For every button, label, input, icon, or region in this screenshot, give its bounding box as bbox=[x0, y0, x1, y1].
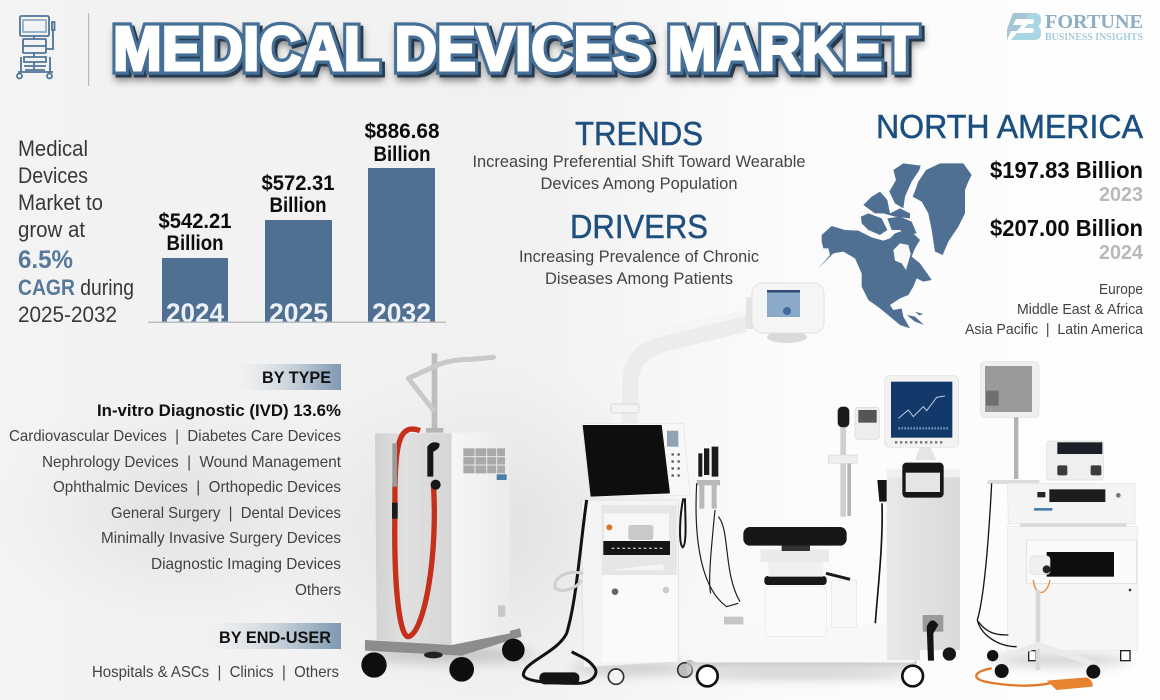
by end-user heading bbox=[205, 623, 341, 649]
by end-user heading: BY END-USER bbox=[219, 629, 331, 647]
by type list: Others bbox=[295, 582, 341, 599]
by type heading: BY TYPE bbox=[262, 369, 331, 387]
CAGR text block: Devices bbox=[18, 163, 88, 188]
drivers block bbox=[519, 209, 759, 288]
bar 2025 bbox=[262, 172, 335, 328]
by type list: Nephrology Devices | Wound Management bbox=[42, 454, 342, 471]
device: stacked unit with stand monitor bbox=[976, 362, 1137, 690]
trends block: Increasing Preferential Shift Toward Wearable bbox=[472, 152, 806, 171]
title: MEDICAL DEVICES MARKET bbox=[115, 21, 920, 90]
title: MEDICAL DEVICES MARKET bbox=[113, 15, 918, 84]
trends block: Devices Among Population bbox=[540, 174, 738, 193]
other regions: Middle East & Africa bbox=[1017, 301, 1144, 318]
by end-user list: Hospitals & ASCs | Clinics | Others bbox=[92, 664, 339, 681]
by type list bbox=[9, 402, 342, 599]
bar 2032: $886.68 bbox=[364, 120, 440, 143]
other regions: Asia Pacific | Latin America bbox=[965, 321, 1144, 338]
by type list: Minimally Invasive Surgery Devices bbox=[101, 530, 341, 547]
region values: $207.00 Billion bbox=[990, 215, 1143, 241]
header divider bbox=[88, 13, 89, 86]
device: articulated arm monitor bbox=[611, 283, 824, 425]
CAGR text block: CAGR during bbox=[18, 275, 134, 300]
drivers block: Increasing Prevalence of Chronic bbox=[519, 247, 759, 266]
by type list: General Surgery | Dental Devices bbox=[111, 505, 341, 522]
by type list: Diagnostic Imaging Devices bbox=[151, 556, 341, 573]
bar 2024: $542.21 bbox=[158, 210, 232, 233]
bar 2024: 2024 bbox=[166, 298, 224, 328]
bar 2025: 2025 bbox=[269, 298, 328, 328]
CAGR text block: Medical bbox=[18, 136, 88, 161]
bar 2032: Billion bbox=[374, 143, 430, 166]
CAGR text block: grow at bbox=[18, 217, 85, 242]
device: monitor cart with black hose bbox=[523, 423, 743, 684]
bar 2024 bbox=[158, 210, 232, 328]
other regions: Europe bbox=[1099, 281, 1143, 298]
title: MEDICAL DEVICES MARKET bbox=[113, 15, 918, 84]
CAGR text block: 6.5% bbox=[18, 246, 73, 274]
device: small wall mounted meters bbox=[828, 407, 879, 517]
map: North America bbox=[818, 163, 972, 328]
bar 2025: $572.31 bbox=[262, 172, 335, 195]
bar 2032 bbox=[364, 120, 440, 328]
by type list: In-vitro Diagnostic (IVD) 13.6% bbox=[97, 402, 341, 420]
CAGR text block bbox=[18, 136, 134, 327]
device: tall console with blue monitor bbox=[875, 376, 960, 661]
trends block: TRENDS bbox=[575, 116, 703, 153]
region values: 2023 bbox=[1099, 184, 1143, 206]
drivers block: DRIVERS bbox=[570, 209, 708, 246]
device: cabinet with red hose bbox=[361, 353, 525, 682]
by type heading bbox=[235, 364, 341, 390]
bar 2024: Billion bbox=[166, 232, 224, 255]
drivers block: Diseases Among Patients bbox=[545, 269, 733, 288]
by type list: Ophthalmic Devices | Orthopedic Devices bbox=[53, 479, 341, 496]
logo: Fortune Business Insights: FORTUNE bbox=[1045, 11, 1143, 33]
region values bbox=[990, 157, 1144, 264]
other regions bbox=[965, 281, 1144, 338]
bar 2025: Billion bbox=[270, 194, 326, 217]
header icon: medical cart bbox=[17, 16, 54, 78]
trends block bbox=[472, 116, 806, 193]
CAGR text block: Market to bbox=[18, 190, 103, 215]
logo: Fortune Business Insights: BUSINESS INSIGHTS bbox=[1045, 32, 1143, 43]
bar 2032: 2032 bbox=[372, 298, 431, 328]
region values: $197.83 Billion bbox=[990, 157, 1143, 183]
floor shadows bbox=[365, 647, 1130, 678]
bar chart: market size bbox=[148, 120, 446, 328]
logo: Fortune Business Insights bbox=[1007, 11, 1143, 43]
title: MEDICAL DEVICES MARKET bbox=[116, 18, 921, 87]
by type list: Cardiovascular Devices | Diabetes Care Devices bbox=[9, 428, 341, 445]
CAGR text block: 2025-2032 bbox=[18, 302, 117, 327]
region heading: NORTH AMERICA bbox=[876, 109, 1144, 146]
device: exam table bbox=[687, 527, 923, 686]
region values: 2024 bbox=[1099, 242, 1144, 264]
